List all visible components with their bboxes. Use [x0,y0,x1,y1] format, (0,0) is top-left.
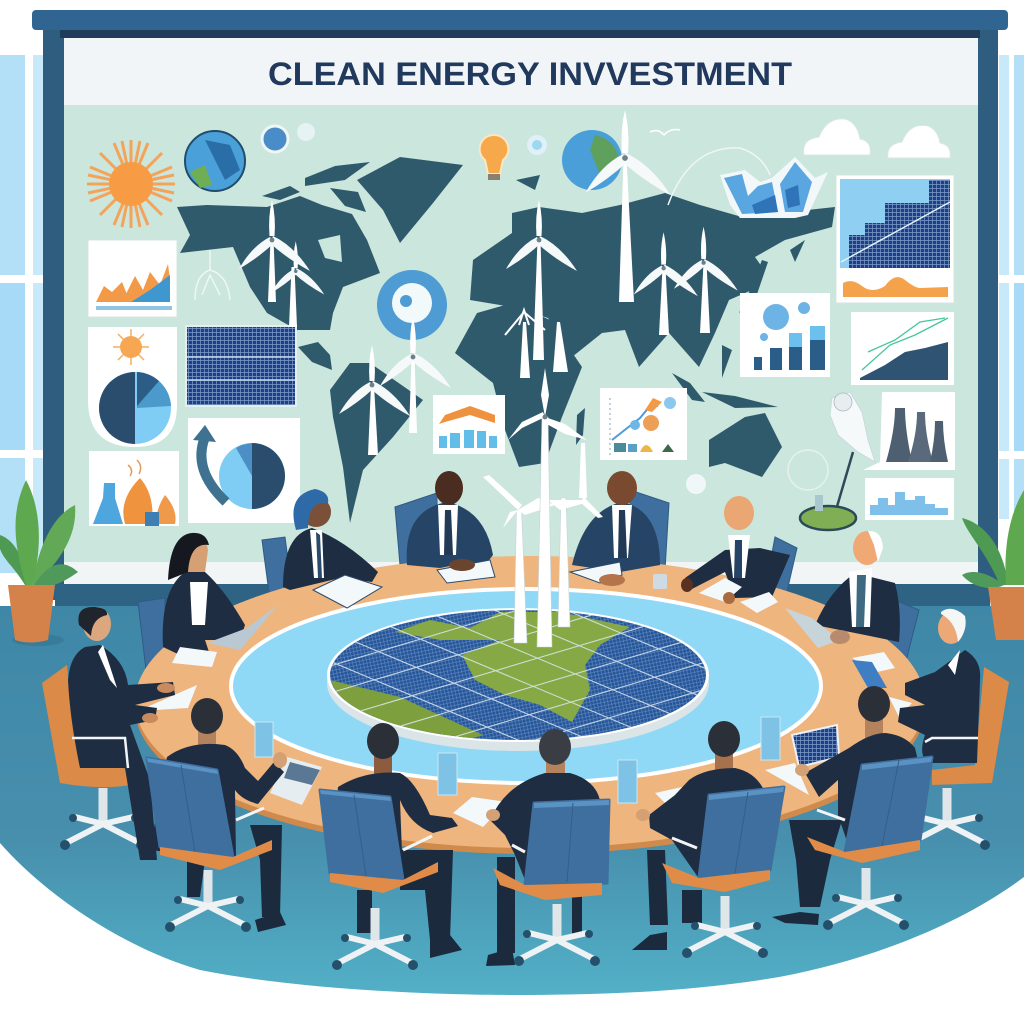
solar globe [327,608,709,751]
map panel background [64,105,978,563]
title: CLEAN ENERGY INVVESTMENT [268,56,792,92]
icon: globe left [185,131,245,191]
icon: globe right [562,130,622,190]
hudson bay [318,235,342,262]
chair: left orange [42,665,146,850]
icon: small circles [262,123,315,152]
solar panel [186,326,296,406]
icon: gear [527,135,547,155]
hands on table [449,559,850,644]
far chairs [138,490,919,670]
plant: left [0,480,78,646]
icon: tree network [195,250,230,300]
illustration: flasks and flames [89,451,179,526]
chart: bars right [740,293,830,377]
person: front 4 [632,721,784,958]
icon: birds [650,130,680,135]
chart: mini bars [433,395,505,454]
arc over the map [668,148,770,205]
chart: line right [851,312,954,385]
icon: clouds [804,119,950,158]
person: far centre left man [407,471,493,568]
person: far centre right man [572,471,660,572]
chart: skyline card [865,478,954,520]
icon: blue crystal graphic [720,157,828,218]
display frame [32,10,1008,600]
water ring [231,589,821,783]
person: far right grey hair man [815,531,900,642]
illustration: balloon on stand [788,392,875,530]
person: far left woman [163,533,245,655]
central wind turbines [483,368,603,647]
plant: right [962,490,1024,640]
wind turbines on the map [239,110,738,455]
person: front 2 [320,723,462,970]
icon: light bulb [480,135,508,180]
chart: scatter card [600,388,687,460]
chart: pie with arrow [188,418,300,523]
chair: right orange [904,667,1009,850]
person: front 1 [147,698,287,932]
icon: location circle [377,270,447,340]
round table [135,556,925,854]
world map [177,157,835,523]
icon: sun [87,140,175,228]
person: right side man [898,609,980,763]
person: far woman blue hair [283,489,378,590]
illustration: cooling towers [863,392,955,470]
white band below map [64,562,978,584]
title band [64,38,978,105]
chart: pie with sun [88,327,177,447]
person: front 5 [772,686,932,930]
right windows [999,55,1024,519]
person: left side man [68,607,175,860]
person: far right bald man [685,496,790,598]
chart: area top left [88,240,177,317]
floor [0,606,1024,995]
table papers and devices [147,560,912,827]
chart: solar stepped chart [836,175,954,303]
icon: gear small [686,474,706,494]
person: front 3 [486,729,609,966]
left windows [0,55,43,573]
wall strip under the display [55,584,990,606]
